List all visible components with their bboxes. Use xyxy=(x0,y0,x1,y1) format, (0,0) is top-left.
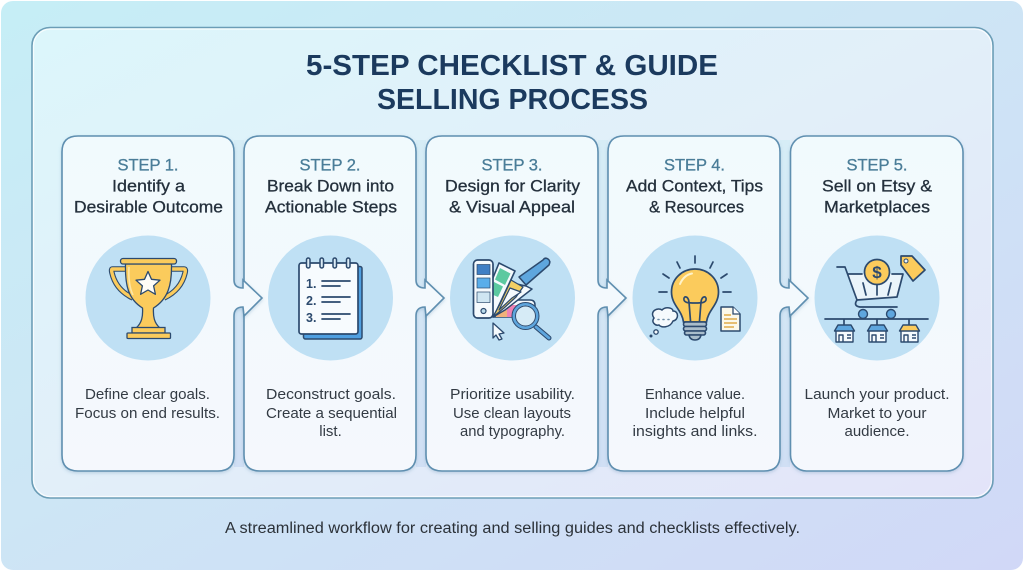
title: SELLING PROCESS xyxy=(377,84,648,116)
step 5 label: STEP 5. xyxy=(846,156,908,174)
panel: step 2 xyxy=(244,136,444,471)
step 3 description: and typography. xyxy=(460,423,565,440)
step 5 heading: Sell on Etsy & xyxy=(822,176,933,196)
icon: numbered notepad: 1. xyxy=(306,277,316,291)
footer caption: A streamlined workflow for creating and selling guides and checklists effectively. xyxy=(225,520,800,537)
step 2 heading: Actionable Steps xyxy=(265,198,397,216)
step 3 heading xyxy=(445,176,581,216)
panel: main container xyxy=(32,28,993,498)
step 2 description: Deconstruct goals. xyxy=(266,386,396,403)
step 5 heading: Marketplaces xyxy=(824,198,930,216)
icon: shopping cart and storefronts xyxy=(814,236,940,360)
step 3 description: Use clean layouts xyxy=(453,405,571,422)
step 1 description: Define clear goals. xyxy=(85,386,210,403)
step 1 description: Focus on end results. xyxy=(75,405,220,422)
step 3 label: STEP 3. xyxy=(482,156,542,174)
icon: numbered notepad xyxy=(268,236,393,360)
title: 5-STEP CHECKLIST & GUIDE xyxy=(306,50,718,82)
step 4 description: Include helpful xyxy=(645,405,745,422)
step 1 heading: Identify a xyxy=(112,176,186,196)
step 4 label: STEP 4. xyxy=(664,156,725,174)
step 5 description: Launch your product. xyxy=(804,386,950,403)
step 1 heading: Desirable Outcome xyxy=(74,198,223,216)
step 2 heading xyxy=(265,176,397,216)
step 3 description: Prioritize usability. xyxy=(450,386,575,403)
step 2 heading: Break Down into xyxy=(267,176,394,196)
panel: step 3 xyxy=(426,136,626,471)
step 3 description xyxy=(450,386,575,440)
panel: step 4 xyxy=(608,136,808,471)
step 2 description: list. xyxy=(319,423,342,440)
step 2 description: Create a sequential xyxy=(266,405,397,422)
step 2 label: STEP 2. xyxy=(300,156,360,174)
icon: colour swatches, pen and magnifier xyxy=(450,236,575,360)
panel: step 5 xyxy=(790,136,963,471)
step 4 heading xyxy=(626,176,763,216)
step 4 description xyxy=(632,386,758,440)
step 3 heading: Design for Clarity xyxy=(445,176,581,196)
icon: numbered notepad: 2. xyxy=(306,294,316,308)
step 1 description xyxy=(75,386,220,422)
step 5 description xyxy=(804,386,950,440)
icon: shopping cart and storefronts: $ xyxy=(872,263,882,282)
step 1 heading xyxy=(74,176,223,216)
icon: trophy xyxy=(86,236,210,360)
step 5 heading xyxy=(822,176,933,216)
step 1 label: STEP 1. xyxy=(118,156,178,174)
step 2 description xyxy=(266,386,397,440)
step 4 heading: & Resources xyxy=(649,198,744,216)
step 4 description: insights and links. xyxy=(632,423,758,440)
step 4 description: Enhance value. xyxy=(645,386,745,403)
step 3 heading: & Visual Appeal xyxy=(449,198,575,216)
icon: light bulb xyxy=(632,236,758,360)
step 5 description: audience. xyxy=(844,423,910,440)
step 4 heading: Add Context, Tips xyxy=(626,176,763,196)
step 5 description: Market to your xyxy=(828,405,926,422)
title xyxy=(306,50,718,116)
icon: numbered notepad: 3. xyxy=(306,311,316,325)
panel: step 1 xyxy=(62,136,262,471)
